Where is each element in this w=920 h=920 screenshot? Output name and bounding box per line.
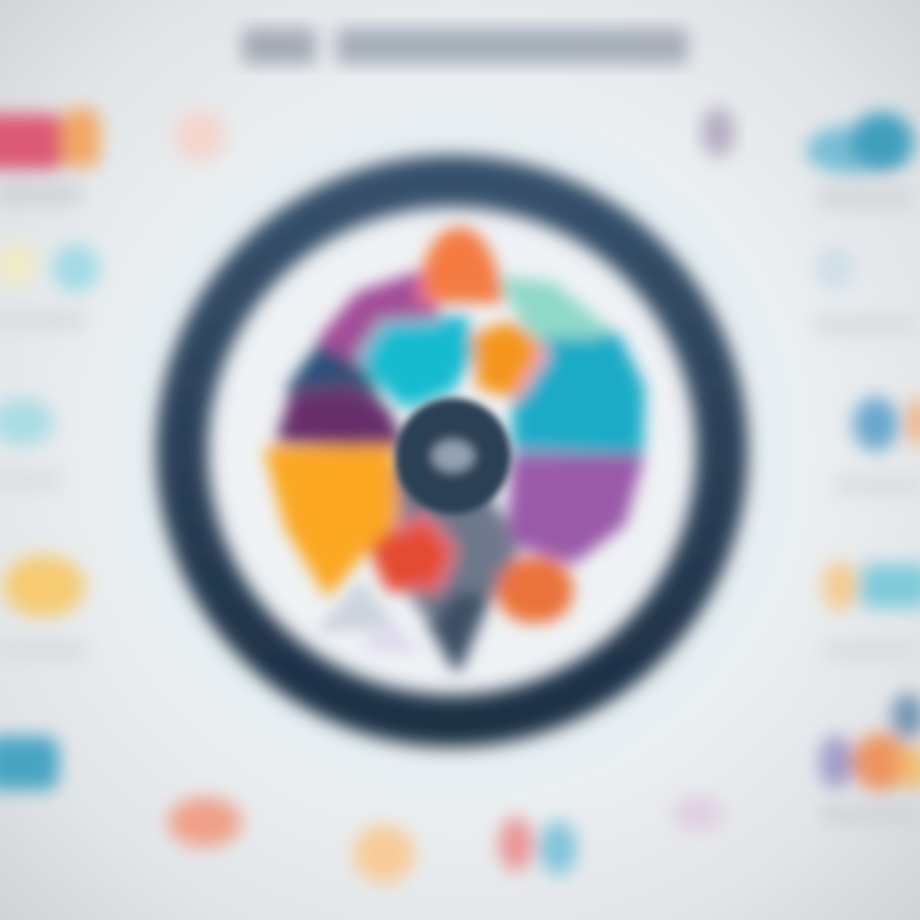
lower faint details bbox=[315, 580, 420, 655]
pie hub bbox=[395, 398, 511, 514]
panel: left row 2 bbox=[0, 242, 100, 330]
segment: red bbox=[372, 515, 455, 590]
panel: top-left icon bbox=[0, 108, 100, 206]
segment: grey tip bbox=[430, 590, 490, 668]
segment: navy bbox=[290, 345, 375, 410]
icon: bottom orange left bbox=[168, 797, 242, 847]
panel: right row 2 bbox=[815, 246, 915, 335]
panel: right row 3 bbox=[835, 397, 920, 495]
segment: cyan centre bbox=[358, 318, 470, 405]
segment: purple lower right bbox=[510, 452, 640, 560]
panel: left row 5 bbox=[0, 736, 59, 790]
segment: teal top right bbox=[503, 280, 605, 345]
icon: top-left small bbox=[174, 110, 226, 162]
panel: right row 4 bbox=[823, 561, 920, 660]
segment: orange lower right bbox=[500, 560, 570, 620]
panel: right row 5 bbox=[819, 693, 920, 825]
inner disc bbox=[204, 202, 700, 698]
segment: dark purple bbox=[280, 385, 400, 445]
panel: left row 4 bbox=[0, 555, 85, 660]
icon: bottom purple bbox=[672, 795, 724, 833]
panel: top-right icon bbox=[806, 112, 914, 210]
segment: purple top left bbox=[322, 275, 440, 365]
icon: bottom orange centre bbox=[353, 825, 415, 883]
icon: bottom multicolour bbox=[499, 817, 577, 875]
pie chart bbox=[268, 230, 642, 668]
icon: top-right small bbox=[701, 107, 735, 157]
panel: left row 3 bbox=[0, 398, 60, 490]
segment: orange centre right bbox=[476, 325, 546, 395]
segment: large cyan right bbox=[515, 335, 642, 452]
ring glow bbox=[130, 128, 774, 772]
pie base bbox=[395, 450, 517, 668]
segment: orange top bbox=[420, 230, 500, 300]
main dark ring bbox=[182, 181, 722, 721]
title bbox=[242, 28, 688, 64]
segment: large yellow left bbox=[268, 448, 398, 592]
